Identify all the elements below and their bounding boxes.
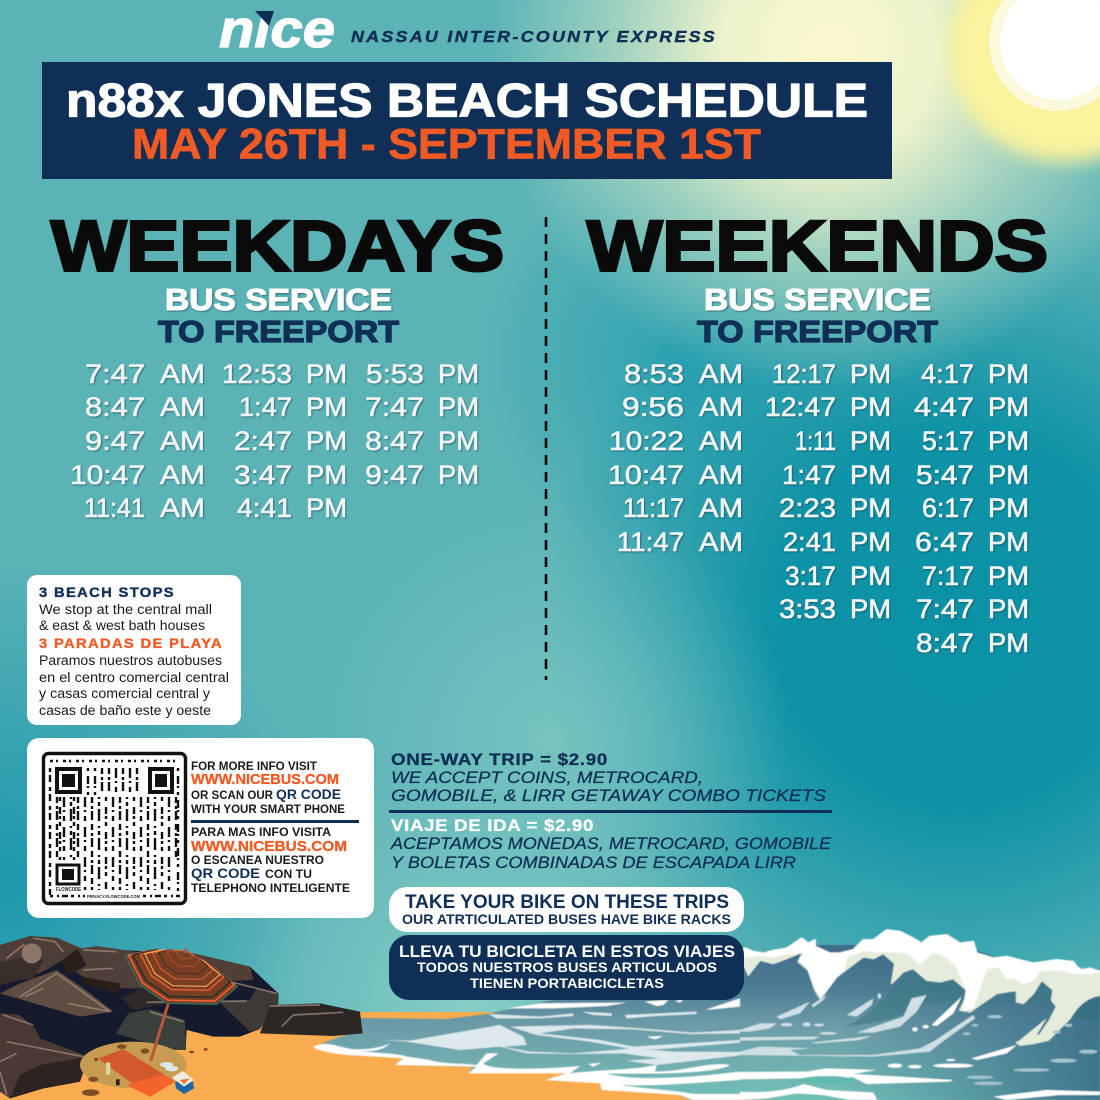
panel: more info and QR code [27,738,374,918]
departure times: weekends: 1:11 [795,426,836,456]
panel: beach stops: y casas comercial central y [39,686,210,701]
title banner [42,62,892,179]
text: English info [191,759,345,816]
pebbles [82,1044,208,1096]
title banner: n88x JONES BEACH SCHEDULE [66,74,868,128]
departure times: weekends: 9:56 [622,392,684,422]
panel: beach stops: Paramos nuestros autobuses [39,653,222,668]
departure times: weekends: 10:47 [608,460,684,490]
logo: NICE Nassau Inter-County Express: nice [219,0,335,59]
departure times: weekdays: 4:41 [237,493,292,523]
departure times: weekends: PM [850,359,891,389]
icon: sun [948,0,1100,162]
departure times: weekdays: AM [160,460,205,490]
towel [98,1049,175,1097]
departure times: weekends: PM [850,460,891,490]
departure times: weekends: 5:47 [916,460,974,490]
departure times: weekends: 7:47 [916,594,974,624]
departure times: weekdays: PM [438,460,479,490]
departure times: weekends: PM [850,561,891,591]
departure times: weekends: 10:22 [609,426,684,456]
departure times: weekdays: AM [160,426,205,456]
shade on sand [80,1042,187,1088]
departure times: weekends: 11:17 [623,493,684,523]
departure times: weekends: 8:53 [624,359,684,389]
departure times: weekends: 11:47 [617,527,684,557]
text block: fares: Y BOLETAS COMBINADAS DE ESCAPADA LIRR [391,853,796,872]
callout: lleva tu bicicleta: TIENEN PORTABICICLETAS [470,975,664,991]
departure times: weekends: 7:17 [922,561,974,591]
departure times: weekdays: PM [306,460,347,490]
text: Spanish info: CON TU [265,867,312,881]
text: Spanish info [191,825,350,895]
text block: fares: VIAJE DE IDA = $2.90 [391,817,594,835]
flip flops and bottles [106,1062,178,1085]
departure times: weekends: PM [988,628,1029,658]
departure times: weekdays: 9:47 [85,426,145,456]
logo: NICE Nassau Inter-County Express: NASSAU INTER-COUNTY EXPRESS [351,29,717,46]
departure times: weekends: PM [988,426,1029,456]
departure times: weekends: PM [850,594,891,624]
departure times: weekends: PM [850,527,891,557]
departure times: weekends: 6:17 [922,493,974,523]
departure times: weekdays: AM [160,392,205,422]
departure times: weekdays [70,359,479,523]
panel: beach stops: 3 BEACH STOPS [39,585,175,600]
departure times: weekdays: PM [438,392,479,422]
departure times: weekends [608,359,1029,658]
water body [313,935,1100,1100]
departure times: weekdays: PM [306,493,347,523]
panel: beach stops: & east & west bath houses [39,618,205,633]
icon: QR code [44,754,186,904]
departure times: weekdays: 7:47 [85,359,145,389]
subheading: bus service to Freeport [158,282,399,349]
departure times: weekdays: 3:47 [234,460,292,490]
subheading: bus service to Freeport: TO FREEPORT [158,314,399,349]
departure times: weekdays: 12:53 [222,359,292,389]
departure times: weekends: PM [988,493,1029,523]
departure times: weekdays: AM [160,359,205,389]
departure times: weekends: AM [699,392,743,422]
panel: beach stops: We stop at the central mall [39,602,212,617]
departure times: weekdays: 1:47 [239,392,292,422]
departure times: weekdays: PM [438,359,479,389]
wave shadows [843,968,967,1027]
cooler [172,1071,194,1094]
text block: fares [389,751,832,872]
departure times: weekends: 3:17 [785,561,836,591]
panel: beach stops: en el centro comercial central [39,670,229,685]
text block: fares: ONE-WAY TRIP = $2.90 [391,751,608,769]
panel: beach stops: casas de baño este y oeste [39,703,211,718]
subheading: weekend bus service to Freeport: BUS SERVICE [704,282,931,317]
departure times: weekdays: 9:47 [365,460,424,490]
water shading toward right edge [840,935,1100,1100]
departure times: weekends: 6:47 [915,527,974,557]
label: Flowcode: FLOWCODE [56,887,82,893]
text: Spanish info: O ESCANEA NUESTRO [191,853,324,867]
illustration: beach sand [0,1012,760,1100]
departure times: weekends: AM [699,426,743,456]
departure times: weekends: PM [988,527,1029,557]
departure times: weekends: AM [699,460,743,490]
departure times: weekends: PM [988,392,1029,422]
departure times: weekdays: 8:47 [85,392,145,422]
foam crest [740,930,1100,1045]
text: English info: WITH YOUR SMART PHONE [191,802,345,816]
subheading: weekend bus service to Freeport: TO FREEPORT [697,314,938,349]
departure times: weekdays: 2:47 [234,426,292,456]
departure times: weekdays: PM [306,426,347,456]
departure times: weekends: PM [988,460,1029,490]
departure times: weekdays: PM [438,426,479,456]
divider [545,217,547,680]
panel: weekdays schedule [51,208,504,523]
callout: lleva tu bicicleta: LLEVA TU BICICLETA EN ESTOS VIAJES [399,942,735,961]
panel: weekends schedule [587,208,1048,658]
rocks [0,936,363,1098]
departure times: weekends: AM [699,527,743,557]
departure times: weekends: PM [988,561,1029,591]
panel: beach stops [27,575,241,725]
text block: fares: ACEPTAMOS MONEDAS, METROCARD, GOMOBILE [390,834,832,853]
departure times: weekends: 5:17 [922,426,974,456]
departure times: weekdays: PM [306,359,347,389]
departure times: weekends: 4:47 [914,392,974,422]
umbrella [125,948,237,1061]
departure times: weekends: 12:47 [765,392,836,422]
callout: lleva tu bicicleta: TODOS NUESTROS BUSES ARTICULADOS [417,959,717,975]
subheading: weekend bus service to Freeport [697,282,938,349]
callout: lleva tu bicicleta [389,935,744,1000]
text: Spanish info: WWW.NICEBUS.COM [191,839,347,855]
departure times: weekdays: AM [160,493,205,523]
departure times: weekends: 12:17 [772,359,836,389]
shoreline foam and streaks [313,998,740,1100]
illustration: rocks, umbrella and towel [0,936,363,1098]
logo: NICE Nassau Inter-County Express [219,11,715,48]
icon: QR code: PRIVACY.FLOWCODE.COM [87,894,140,899]
departure times: weekends: 2:41 [783,527,836,557]
text block: fares: WE ACCEPT COINS, METROCARD, [391,768,703,787]
heading: weekends: WEEKENDS [587,208,1048,286]
departure times: weekends: 3:53 [779,594,836,624]
departure times: weekdays: 7:47 [365,392,424,422]
departure times: weekdays: PM [306,392,347,422]
departure times: weekdays: 10:47 [70,460,145,490]
departure times: weekdays: 8:47 [365,426,424,456]
departure times: weekends: AM [699,359,743,389]
text: Spanish info: PARA MAS INFO VISITA [191,825,331,839]
departure times: weekends: 1:47 [782,460,836,490]
heading: weekdays: WEEKDAYS [51,208,504,286]
departure times: weekends: 8:47 [916,628,974,658]
departure times: weekends: PM [850,426,891,456]
departure times: weekends: PM [988,594,1029,624]
departure times: weekends: PM [988,359,1029,389]
foam streaks [740,993,975,1057]
subheading: bus service to Freeport: BUS SERVICE [165,282,392,317]
departure times: weekends: 4:17 [921,359,974,389]
departure times: weekends: AM [699,493,743,523]
breaking wave [740,930,1100,1100]
text: English info: WWW.NICEBUS.COM [191,772,339,788]
callout: take your bike: OUR ATRTICULATED BUSES HAVE BIKE RACKS [402,911,731,927]
title banner: MAY 26TH - SEPTEMBER 1ST [132,122,761,169]
text: English info: QR CODE [276,786,341,802]
text: English info: OR SCAN OUR [191,788,273,802]
text: Spanish info: QR CODE [191,865,260,881]
panel: beach stops: 3 PARADAS DE PLAYA [39,636,223,651]
departure times: weekdays: 5:53 [366,359,424,389]
departure times: weekends: 2:23 [779,493,836,523]
departure times: weekends: PM [850,392,891,422]
callout: take your bike: TAKE YOUR BIKE ON THESE TRIPS [405,892,729,913]
callout: take your bike [389,887,744,932]
departure times: weekdays: 11:41 [84,493,145,523]
text: English info: FOR MORE INFO VISIT [191,759,318,773]
text block: fares: GOMOBILE, & LIRR GETAWAY COMBO TICKETS [391,786,827,805]
departure times: weekends: PM [850,493,891,523]
text: Spanish info: TELEPHONO INTELIGENTE [191,881,350,895]
illustration: waves [313,930,1100,1100]
